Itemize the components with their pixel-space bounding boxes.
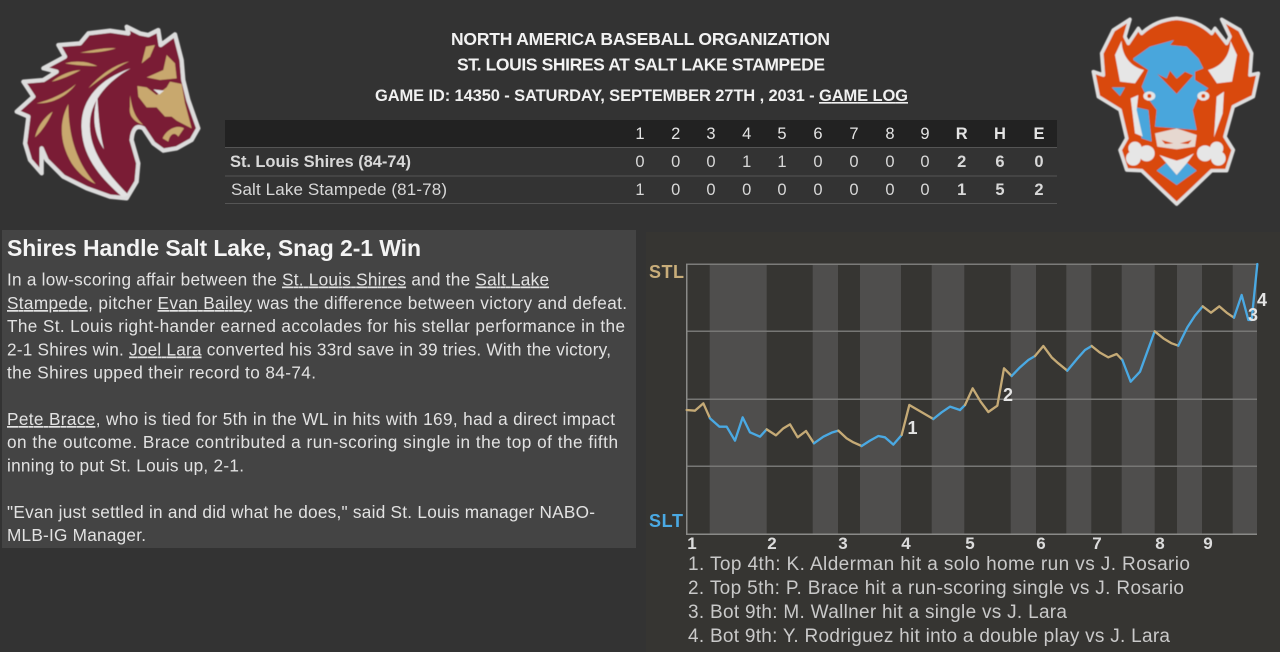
article paragraph 1: Stampede, pitcher Evan Bailey was the difference between victory and defeat.: [7, 293, 627, 313]
article paragraph 2: Pete Brace, who is tied for 5th in the WL in hits with 169, had a direct impact: [7, 409, 615, 429]
row: Salt Lake Stampede: [231, 180, 1044, 199]
event markers: 4: [1257, 290, 1267, 310]
row: Salt Lake Stampede: 0: [742, 181, 751, 199]
key plays list: 1. Top 4th: K. Alderman hit a solo home run vs J. Rosario: [688, 554, 1190, 575]
article paragraph 3: MLB-IG Manager.: [7, 525, 146, 545]
row: Salt Lake Stampede: 0: [777, 181, 787, 199]
header row: E: [1033, 125, 1045, 143]
row: St. Louis Shires: 0: [671, 153, 680, 171]
axis label: SLT: SLT: [649, 511, 683, 531]
header row: 4: [742, 125, 751, 143]
article paragraph 1: 2-1 Shires win. Joel Lara converted his 33rd save in 39 tries. With the victory,: [7, 340, 611, 360]
line score table: [225, 120, 1057, 204]
row: St. Louis Shires: St. Louis Shires (84-74): [230, 153, 411, 171]
header row: [635, 125, 1045, 143]
title: league name: NORTH AMERICA BASEBALL ORGANIZATION: [451, 29, 830, 49]
row: St. Louis Shires: 6: [995, 153, 1005, 171]
row: St. Louis Shires: [230, 153, 1044, 171]
inning axis labels: 1: [687, 534, 697, 553]
row: Salt Lake Stampede: 0: [849, 181, 859, 199]
row: St. Louis Shires: 0: [813, 153, 823, 171]
row: St. Louis Shires: 0: [635, 153, 645, 171]
header row: 9: [920, 125, 930, 143]
win probability line: [687, 264, 1257, 446]
inning axis labels: 3: [838, 534, 848, 553]
logo: St. Louis Shires horse: [17, 27, 198, 198]
header row: 3: [706, 125, 716, 143]
article paragraph 2: [7, 409, 618, 476]
axis label: STL: STL: [649, 262, 684, 282]
article paragraph 2: on the outcome. Brace contributed a run-scoring single in the top of the fifth: [7, 432, 618, 452]
game id and date line: GAME ID: 14350 - SATURDAY, SEPTEMBER 27TH , 2031 - GAME LOG: [375, 87, 908, 105]
key plays list: 4. Bot 9th: Y. Rodriguez hit into a double play vs J. Lara: [688, 626, 1170, 647]
header row: 5: [777, 125, 787, 143]
header row: 2: [671, 125, 680, 143]
row: St. Louis Shires: 0: [920, 153, 930, 171]
row: St. Louis Shires: 1: [777, 153, 787, 171]
inning axis labels: 4: [901, 534, 911, 553]
inning axis labels: 8: [1155, 534, 1165, 553]
row: St. Louis Shires: 2: [957, 153, 966, 171]
row: St. Louis Shires: 0: [706, 153, 716, 171]
inning axis labels: 2: [767, 534, 777, 553]
article paragraph 2: inning to put St. Louis up, 2-1.: [7, 456, 244, 476]
row: Salt Lake Stampede: 5: [995, 181, 1005, 199]
header row: R: [956, 125, 968, 143]
article paragraph 1: The St. Louis right-hander earned accolades for his stellar performance in the: [7, 316, 625, 336]
inning axis labels: 9: [1203, 534, 1213, 553]
game header: [375, 29, 908, 105]
inning axis labels: 5: [965, 534, 975, 553]
row: St. Louis Shires: 0: [885, 153, 895, 171]
row: Salt Lake Stampede: 2: [1034, 181, 1044, 199]
title: matchup: ST. LOUIS SHIRES AT SALT LAKE STAMPEDE: [457, 54, 825, 74]
header row: 8: [885, 125, 895, 143]
panel: win probability chart: [646, 232, 1280, 652]
header row: 6: [813, 125, 823, 143]
article paragraph 1: the Shires upped their record to 84-74.: [7, 362, 316, 382]
panel: game recap article: [2, 230, 636, 548]
header row: 7: [849, 125, 859, 143]
key plays list: [688, 554, 1190, 647]
event markers: 1: [907, 418, 918, 438]
row: Salt Lake Stampede: 0: [706, 181, 716, 199]
article paragraph 1: In a low-scoring affair between the St. Louis Shires and the Salt Lake: [7, 270, 549, 290]
inning axis labels: [687, 534, 1213, 553]
row: Salt Lake Stampede: Salt Lake Stampede (81-78): [231, 180, 447, 199]
event markers: 2: [1003, 385, 1013, 405]
inning axis labels: 6: [1036, 534, 1046, 553]
article paragraph 3: "Evan just settled in and did what he does," said St. Louis manager NABO-: [7, 502, 595, 522]
article heading: Shires Handle Salt Lake, Snag 2-1 Win: [7, 235, 421, 261]
row: St. Louis Shires: 0: [1034, 153, 1044, 171]
article paragraph 3: [7, 502, 595, 545]
row: Salt Lake Stampede: 0: [813, 181, 823, 199]
event markers: [907, 290, 1267, 438]
row: St. Louis Shires: 0: [849, 153, 859, 171]
row: Salt Lake Stampede: 0: [920, 181, 930, 199]
row: Salt Lake Stampede: 0: [671, 181, 680, 199]
row: Salt Lake Stampede: 1: [957, 181, 966, 199]
row: St. Louis Shires: 1: [742, 153, 751, 171]
event markers: 3: [1248, 305, 1258, 325]
key plays list: 2. Top 5th: P. Brace hit a run-scoring single vs J. Rosario: [688, 578, 1184, 599]
article paragraph 1: [7, 270, 627, 382]
inning bands: [710, 264, 1257, 534]
key plays list: 3. Bot 9th: M. Wallner hit a single vs J. Lara: [688, 602, 1067, 623]
row: Salt Lake Stampede: 0: [885, 181, 895, 199]
inning axis labels: 7: [1092, 534, 1102, 553]
logo: Salt Lake Stampede bison: [1093, 18, 1258, 204]
header row: 1: [635, 125, 645, 143]
header row: H: [994, 125, 1006, 143]
row: Salt Lake Stampede: 1: [635, 181, 645, 199]
